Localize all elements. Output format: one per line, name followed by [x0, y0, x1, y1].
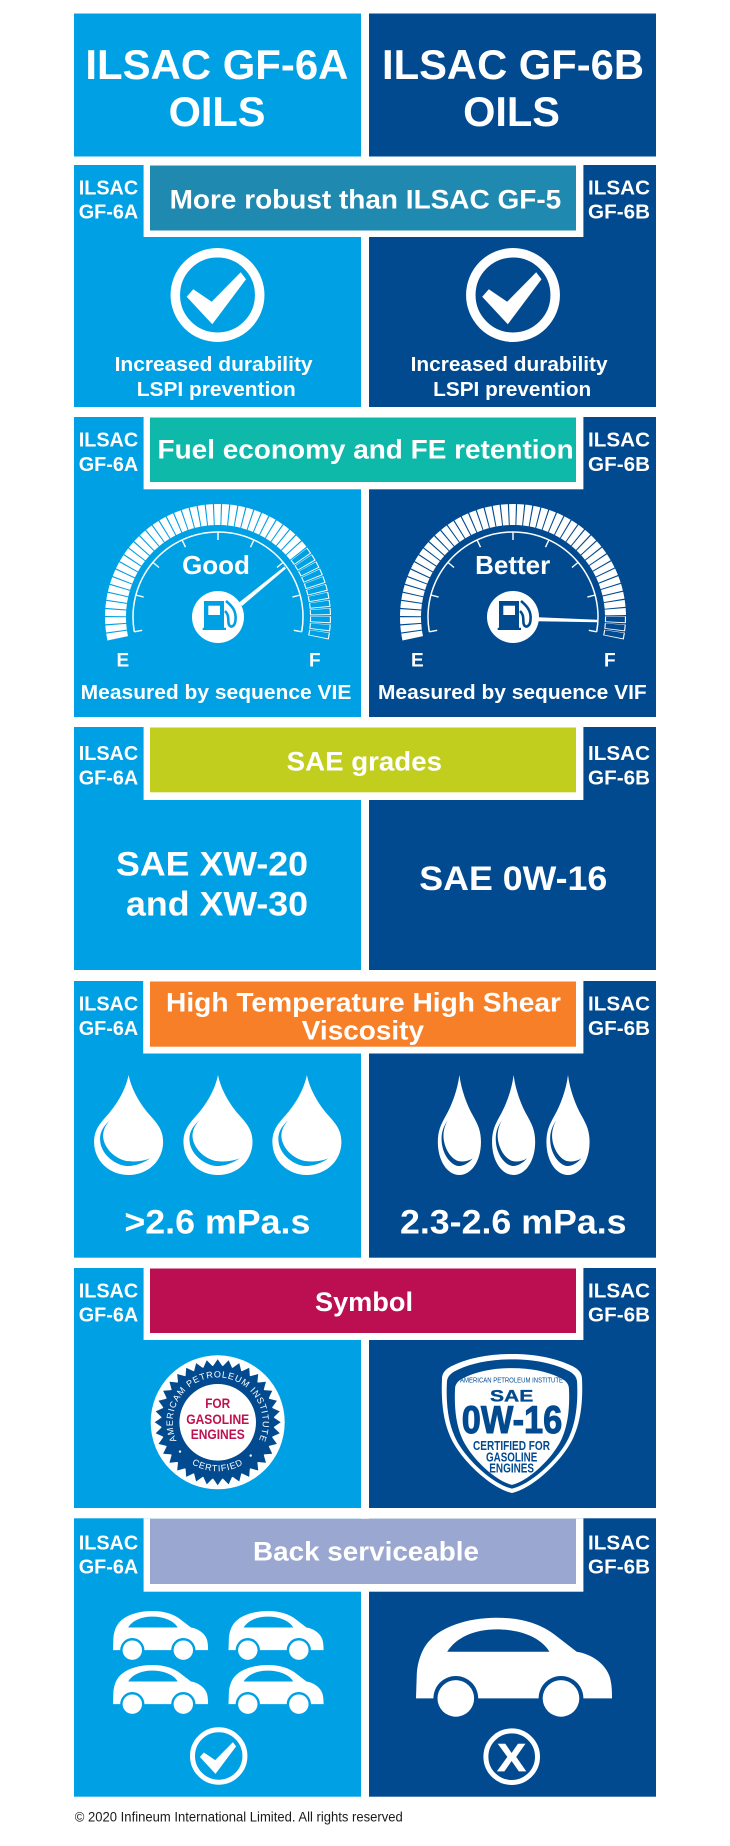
icon: SAE shield: ENGINES [489, 1462, 534, 1476]
row: back serviceable [74, 1518, 656, 1797]
panel: GF-6A viscosity [74, 981, 361, 1258]
heading: More robust [144, 165, 583, 237]
icon: API starburst badge: FOR [205, 1395, 230, 1411]
panel: GF-6A back serviceable: GF-6A [79, 1556, 138, 1578]
icon: SAE shield: SAE [490, 1387, 533, 1406]
panel: GF-6B title [369, 14, 656, 156]
panel: GF-6B grades: ILSAC [588, 743, 650, 765]
row: viscosity [74, 981, 656, 1258]
heading: Symbol [144, 1268, 583, 1340]
copyright note: © 2020 Infineum International Limited. All rights reserved [75, 1810, 403, 1825]
panel: GF-6B back serviceable: GF-6B [588, 1556, 650, 1578]
icon: API starburst badge: AMERICAM PETROLEUM INSTITUTE [166, 1371, 269, 1442]
panel: GF-6B viscosity: GF-6B [588, 1018, 650, 1040]
panel: GF-6B symbol: GF-6B [588, 1305, 650, 1327]
panel: GF-6A viscosity: ILSAC [79, 994, 138, 1016]
text: durability: Increased durability [411, 354, 608, 376]
text: durability [115, 354, 314, 401]
gauge end labels: E [116, 650, 129, 672]
icon: API starburst badge: GASOLINE [186, 1411, 249, 1427]
icon: SAE shield: GASOLINE [486, 1451, 537, 1465]
panel: GF-6B fuel economy: ILSAC [588, 430, 650, 452]
panel: GF-6A fuel economy [74, 417, 361, 717]
text: XW grades [116, 846, 308, 924]
row: fuel economy [74, 417, 656, 717]
panel: GF-6A grades [74, 727, 361, 970]
panel: GF-6B grades: GF-6B [588, 767, 650, 789]
text: durability: Increased durability [115, 354, 314, 376]
heading: HTHS viscosity: High Temperature High Shear [166, 988, 562, 1018]
gauge: Good [116, 514, 320, 643]
text: XW grades: and XW-30 [126, 886, 308, 924]
icon: wide drops [94, 1075, 341, 1175]
row: SAE grades [74, 727, 656, 970]
panel: GF-6A back serviceable: ILSAC [79, 1532, 138, 1554]
panel: GF-6B fuel economy: GF-6B [588, 454, 650, 476]
heading: SAE grades [144, 727, 583, 800]
title row [74, 14, 656, 156]
gauge end labels [116, 650, 321, 672]
icon: API starburst badge: CERTIFIED [193, 1460, 242, 1472]
icon: check mark [175, 253, 260, 337]
panel: GF-6B robustness [369, 165, 656, 407]
gauge end labels [411, 650, 616, 672]
row: robustness [74, 165, 656, 407]
text: 0W-16: SAE 0W-16 [419, 860, 607, 898]
icon: cross in circle: X [497, 1737, 526, 1780]
icon: large car [416, 1618, 612, 1721]
heading: HTHS viscosity: Viscosity [302, 1015, 424, 1045]
heading: Fuel economy: Fuel economy and FE retention [158, 434, 574, 464]
panel: GF-6A grades: ILSAC [79, 743, 138, 765]
gauge end labels: E [411, 650, 424, 672]
icon: cross in circle [486, 1731, 538, 1782]
panel: GF-6B back serviceable [369, 1518, 656, 1797]
heading: Back serviceable: Back serviceable [253, 1537, 479, 1567]
heading: Symbol: Symbol [315, 1287, 413, 1317]
icon: SAE shield: CERTIFIED FOR [473, 1439, 550, 1453]
value: 2.3-2.6: 2.3-2.6 mPa.s [400, 1203, 626, 1241]
panel: GF-6A title: ILSAC GF-6A [85, 41, 348, 88]
panel: GF-6B robustness: GF-6B [588, 202, 650, 224]
panel: GF-6A symbol: GF-6A [79, 1305, 138, 1327]
gauge: Better [410, 514, 616, 643]
panel: GF-6B robustness: ILSAC [588, 177, 650, 199]
value: above 2.6: >2.6 mPa.s [124, 1203, 310, 1241]
panel: GF-6B viscosity [369, 981, 656, 1258]
panel: GF-6A robustness: ILSAC [79, 177, 138, 199]
panel: GF-6A robustness: GF-6A [79, 202, 138, 224]
gauge label: Better: Better [475, 550, 550, 580]
panel: GF-6B grades [369, 727, 656, 970]
panel: GF-6B fuel economy [369, 417, 656, 717]
panel: GF-6A fuel economy: ILSAC [79, 430, 138, 452]
panel: GF-6A title: OILS [169, 88, 265, 135]
row: symbol [74, 1268, 656, 1508]
gauge label: Good: Good [182, 550, 250, 580]
panel: GF-6A symbol: ILSAC [79, 1280, 138, 1302]
panel: GF-6A robustness [74, 165, 361, 407]
panel: GF-6A viscosity: GF-6A [79, 1018, 138, 1040]
text: sequence VIE: Measured by sequence VIE [81, 682, 351, 704]
heading: HTHS viscosity [143, 981, 583, 1054]
heading: More robust: More robust than ILSAC GF-5 [170, 184, 561, 214]
panel: GF-6B title: ILSAC GF-6B [382, 41, 644, 88]
icon: SAE shield: AMERICAN PETROLEUM INSTITUTE [460, 1376, 563, 1385]
text: durability [411, 354, 608, 401]
panel: GF-6A title [74, 14, 361, 156]
panel: GF-6B back serviceable: ILSAC [588, 1532, 650, 1554]
icon: SAE shield: 0W-16 [462, 1399, 562, 1442]
heading: Back serviceable [144, 1518, 583, 1592]
panel: GF-6A back serviceable [74, 1518, 361, 1797]
panel: GF-6B symbol: ILSAC [588, 1280, 650, 1302]
icon: SAE shield [442, 1354, 582, 1493]
text: sequence VIF: Measured by sequence VIF [378, 682, 647, 704]
panel: GF-6B viscosity: ILSAC [588, 994, 650, 1016]
icon: check mark [471, 253, 555, 337]
text: durability: LSPI prevention [433, 379, 591, 401]
icon: API starburst badge: ENGINES [191, 1426, 245, 1442]
panel: GF-6B title: OILS [463, 88, 560, 135]
panel: GF-6A fuel economy: GF-6A [79, 454, 138, 476]
icon: four cars [113, 1611, 324, 1716]
icon: narrow drops [438, 1075, 590, 1175]
gauge end labels: F [604, 650, 616, 672]
icon: small check [192, 1730, 245, 1782]
gauge end labels: F [309, 650, 321, 672]
heading: Fuel economy [144, 417, 583, 489]
panel: GF-6A grades: GF-6A [79, 767, 138, 789]
text: XW grades: SAE XW-20 [116, 846, 308, 884]
icon: API starburst badge [150, 1355, 285, 1490]
panel: GF-6B symbol [369, 1268, 656, 1508]
panel: GF-6A symbol [74, 1268, 361, 1508]
heading: SAE grades: SAE grades [287, 747, 442, 777]
text: durability: LSPI prevention [137, 379, 296, 401]
